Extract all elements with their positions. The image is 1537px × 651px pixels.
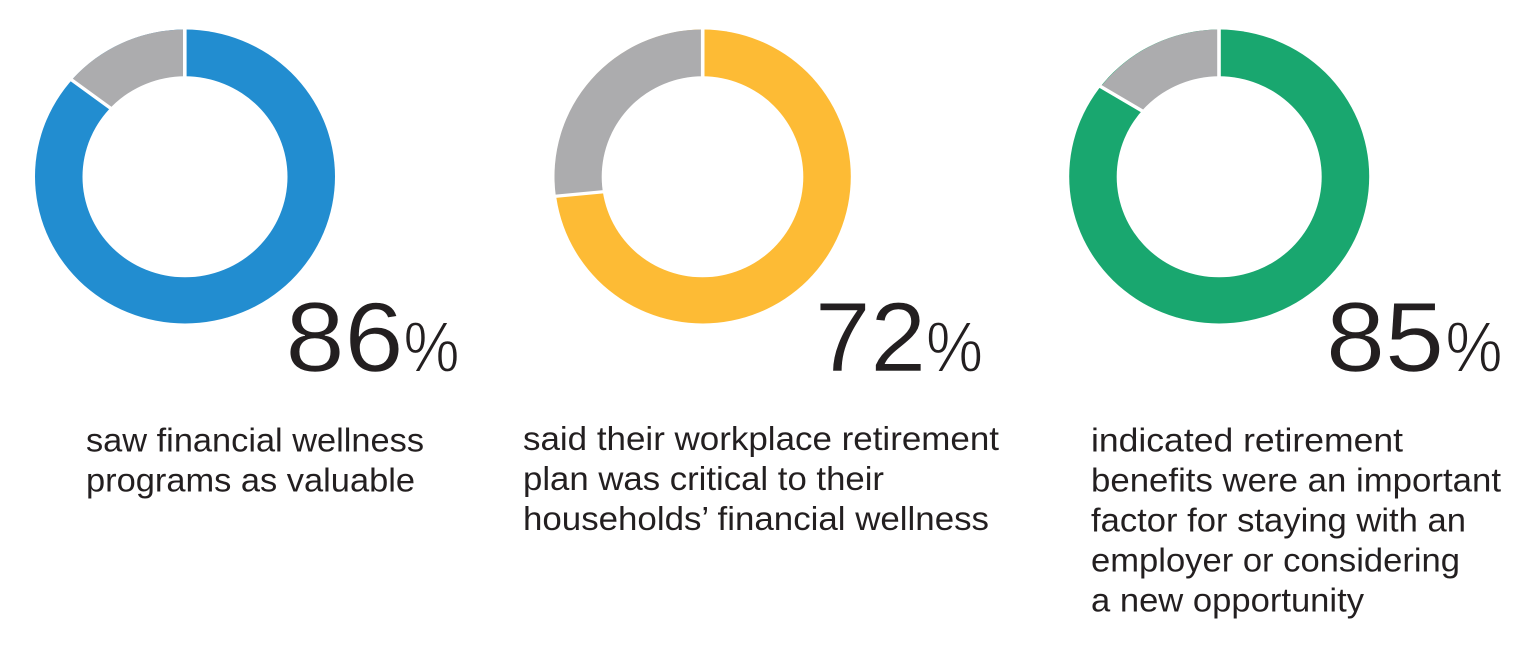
caption: financial wellness xyxy=(86,422,424,498)
caption: financial wellness: saw financial wellness xyxy=(86,422,424,458)
panel: 72 percent statistic xyxy=(523,27,999,537)
value: 85% xyxy=(1326,282,1502,392)
donut chart: 85 percent xyxy=(1069,27,1369,324)
caption: retirement benefits: factor for staying with an xyxy=(1091,502,1466,538)
caption: retirement benefits: a new opportunity xyxy=(1091,582,1365,618)
caption: retirement plan: plan was critical to their xyxy=(523,460,884,497)
value: 86% xyxy=(286,282,460,392)
value: 85%: 85 xyxy=(1326,282,1444,392)
value: 86%: 86 xyxy=(286,282,404,392)
caption: retirement plan: households’ financial wellness xyxy=(523,500,989,537)
donut chart: 72 percent xyxy=(553,27,851,324)
panel: 86 percent statistic xyxy=(35,27,460,498)
value: 72%: % xyxy=(926,308,983,388)
value: 86%: % xyxy=(404,308,460,388)
caption: retirement benefits: employer or considering xyxy=(1091,542,1460,578)
caption: financial wellness: programs as valuable xyxy=(86,462,415,498)
value: 85%: % xyxy=(1446,308,1502,388)
caption: retirement benefits: benefits were an important xyxy=(1091,462,1501,498)
panel: 85 percent statistic xyxy=(1069,27,1502,618)
caption: retirement plan xyxy=(523,420,999,537)
caption: retirement plan: said their workplace retirement xyxy=(523,420,999,457)
caption: retirement benefits xyxy=(1091,422,1501,618)
value: 72% xyxy=(815,282,983,392)
caption: retirement benefits: indicated retirement xyxy=(1091,422,1403,458)
donut chart: 86 percent xyxy=(35,27,335,324)
value: 72%: 72 xyxy=(815,282,926,392)
